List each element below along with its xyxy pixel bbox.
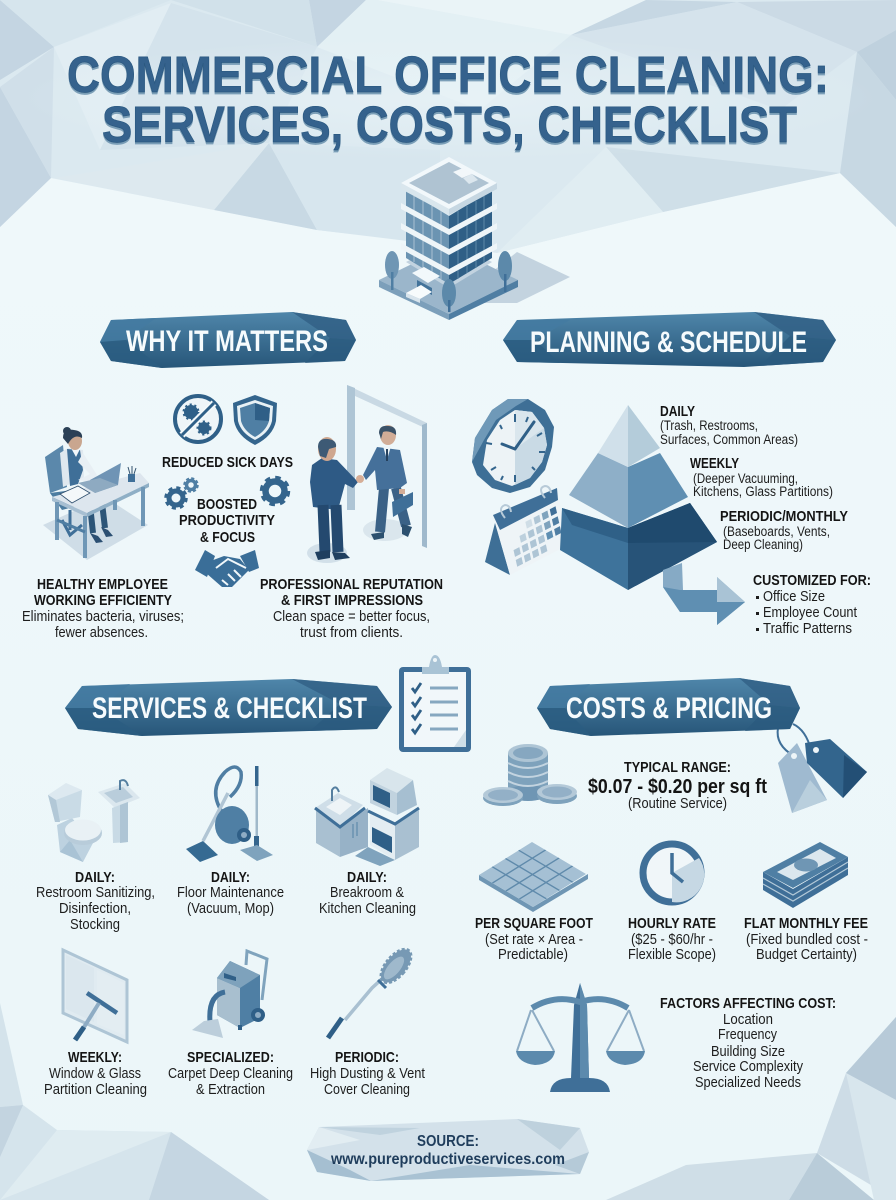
icon: price tags <box>778 724 867 813</box>
text: customized for list: Traffic Patterns <box>763 621 852 637</box>
text: pyramid level daily: Surfaces, Common Areas) <box>660 432 798 447</box>
label: boosted productivity <box>179 496 275 546</box>
text: window cleaning: Partition Cleaning <box>44 1082 147 1098</box>
arrow: to customized for <box>663 563 745 625</box>
text: factors affecting cost: Service Complexity <box>693 1059 804 1075</box>
text: typical range: $0.07 - $0.20 per sq ft <box>588 776 767 798</box>
text block: professional reputation: Clean space = better focus, <box>273 609 430 625</box>
text block: healthy employee: Eliminates bacteria, viruses; <box>22 609 184 625</box>
illustration: door and handshake <box>307 385 427 563</box>
icon: hourly clock <box>643 844 704 902</box>
title: SERVICES, COSTS, CHECKLIST <box>102 96 797 153</box>
text: pyramid level periodic: (Baseboards, Vents, <box>723 524 830 539</box>
icon: gears left <box>166 478 198 508</box>
text: high dusting: High Dusting & Vent <box>310 1066 425 1082</box>
text block: professional reputation: & FIRST IMPRESSIONS <box>281 592 423 609</box>
text: customized for list <box>753 572 871 637</box>
text block: healthy employee: fewer absences. <box>55 625 148 641</box>
icon: handshake <box>195 550 259 587</box>
banner: why it matters: WHY IT MATTERS <box>126 325 328 358</box>
text: floor maintenance: (Vacuum, Mop) <box>187 901 274 917</box>
icon: floor tile grid <box>479 842 588 912</box>
text block: professional reputation <box>260 576 443 641</box>
text: hourly rate: Flexible Scope) <box>628 947 716 963</box>
text: carpet deep cleaning: SPECIALIZED: <box>187 1049 274 1066</box>
text: per square foot: PER SQUARE FOOT <box>475 915 593 932</box>
text: pyramid level weekly: WEEKLY <box>690 455 739 472</box>
text: hourly rate: ($25 - $60/hr - <box>631 932 713 948</box>
icon: coins <box>483 744 577 806</box>
banner: planning and schedule <box>503 312 836 367</box>
text: pyramid level daily: DAILY <box>660 403 695 420</box>
chart: cleaning frequency pyramid <box>560 405 717 590</box>
text: factors affecting cost: FACTORS AFFECTING COST: <box>660 995 836 1012</box>
text: pyramid level periodic: Deep Cleaning) <box>723 537 803 552</box>
text: per square foot <box>475 915 593 963</box>
icon: vacuum and mop <box>186 766 273 862</box>
label: boosted productivity: & FOCUS <box>200 529 255 546</box>
text: flat monthly fee <box>744 915 868 963</box>
panel: costs and pricing <box>475 678 868 1092</box>
panel: planning and schedule <box>472 312 871 637</box>
text: customized for list: CUSTOMIZED FOR: <box>753 572 871 589</box>
text: carpet deep cleaning: & Extraction <box>196 1082 265 1098</box>
text: carpet deep cleaning: Carpet Deep Cleaning <box>168 1066 293 1082</box>
label: boosted productivity: PRODUCTIVITY <box>179 512 275 529</box>
text: flat monthly fee: (Fixed bundled cost - <box>746 932 868 948</box>
text: customized for list: Office Size <box>763 589 825 605</box>
text block: professional reputation: trust from clients. <box>300 625 403 641</box>
text: restroom sanitizing: DAILY: <box>75 869 115 886</box>
panel: why it matters <box>22 312 443 641</box>
text: typical range: TYPICAL RANGE: <box>624 759 731 776</box>
text: per square foot: (Set rate × Area - <box>485 932 583 948</box>
text: flat monthly fee: Budget Certainty) <box>756 947 857 963</box>
text: restroom sanitizing: Restroom Sanitizing, <box>36 885 155 901</box>
illustration: woman working at desk <box>43 427 149 560</box>
text: factors affecting cost <box>660 995 836 1091</box>
text: breakroom and kitchen <box>319 869 416 917</box>
icon: wall clock <box>472 399 554 493</box>
text: flat monthly fee: FLAT MONTHLY FEE <box>744 915 868 932</box>
text: factors affecting cost: Frequency <box>718 1027 778 1043</box>
text: pyramid level daily: (Trash, Restrooms, <box>660 418 758 433</box>
title <box>67 46 829 153</box>
text: carpet deep cleaning <box>168 1049 293 1098</box>
icon: toilet and sink <box>48 780 140 862</box>
text: factors affecting cost: Location <box>723 1012 773 1028</box>
icon: gear right <box>262 478 288 504</box>
source plaque: SOURCE: <box>417 1133 479 1150</box>
text: typical range: (Routine Service) <box>628 796 727 812</box>
text: high dusting <box>310 1049 425 1098</box>
text: hourly rate <box>628 915 716 963</box>
text: breakroom and kitchen: DAILY: <box>347 869 387 886</box>
text: pyramid level weekly: Kitchens, Glass Partitions) <box>693 484 833 499</box>
text: pyramid level weekly: (Deeper Vacuuming, <box>693 471 798 486</box>
text: factors affecting cost: Building Size <box>711 1044 785 1060</box>
text: breakroom and kitchen: Kitchen Cleaning <box>319 901 416 917</box>
text: breakroom and kitchen: Breakroom & <box>330 885 404 901</box>
banner: costs and pricing: COSTS & PRICING <box>566 692 772 725</box>
text: window cleaning <box>44 1049 147 1098</box>
icon: no virus <box>175 396 221 442</box>
background: bottom low-poly facets <box>0 1003 896 1200</box>
icon: window and squeegee <box>63 950 127 1042</box>
label: boosted productivity: BOOSTED <box>197 496 257 513</box>
icon: shield <box>233 395 277 445</box>
text: factors affecting cost: Specialized Needs <box>695 1075 801 1091</box>
icon: kitchen <box>315 768 419 866</box>
banner: why it matters <box>100 312 356 368</box>
icon: stack of cash <box>763 842 848 908</box>
source plaque: www.pureproductiveservices.com <box>330 1151 565 1168</box>
title: COMMERCIAL OFFICE CLEANING: <box>67 46 829 103</box>
text: high dusting: Cover Cleaning <box>324 1082 410 1098</box>
icon: office building <box>379 157 570 320</box>
text: per square foot: Predictable) <box>498 947 568 963</box>
text: customized for list: Employee Count <box>763 605 857 621</box>
text block: professional reputation: PROFESSIONAL REPUTATION <box>260 576 443 593</box>
label: reduced sick days: REDUCED SICK DAYS <box>162 454 293 471</box>
text block: healthy employee: WORKING EFFICIENTY <box>34 592 172 609</box>
icon: carpet extractor <box>192 951 267 1038</box>
text: pyramid level weekly <box>690 455 833 499</box>
text: floor maintenance: Floor Maintenance <box>177 885 284 901</box>
text: high dusting: PERIODIC: <box>335 1049 399 1066</box>
text block: healthy employee <box>22 576 184 641</box>
icon: duster <box>328 944 417 1038</box>
text: floor maintenance <box>177 869 284 917</box>
text: restroom sanitizing: Disinfection, <box>59 901 131 917</box>
text: pyramid level daily <box>660 403 798 447</box>
background: top low-poly facets <box>0 0 896 253</box>
text: window cleaning: WEEKLY: <box>68 1049 122 1066</box>
banner: planning and schedule: PLANNING & SCHEDULE <box>530 326 807 359</box>
text block: healthy employee: HEALTHY EMPLOYEE <box>37 576 168 593</box>
banner: costs and pricing <box>537 678 800 736</box>
text: typical range <box>588 759 767 812</box>
source plaque <box>307 1119 589 1181</box>
banner: services and checklist <box>65 679 392 736</box>
text: pyramid level periodic <box>720 508 848 552</box>
text: hourly rate: HOURLY RATE <box>628 915 716 932</box>
text: pyramid level periodic: PERIODIC/MONTHLY <box>720 508 848 525</box>
icon: calendar <box>485 486 568 575</box>
icon: clipboard checklist <box>399 655 471 752</box>
panel: services and checklist <box>36 655 471 1098</box>
text: restroom sanitizing <box>36 869 155 933</box>
icon: balance scale <box>516 983 645 1092</box>
text: floor maintenance: DAILY: <box>211 869 250 886</box>
text: window cleaning: Window & Glass <box>49 1066 141 1082</box>
text: restroom sanitizing: Stocking <box>70 917 120 933</box>
banner: services and checklist: SERVICES & CHECKLIST <box>92 692 367 725</box>
